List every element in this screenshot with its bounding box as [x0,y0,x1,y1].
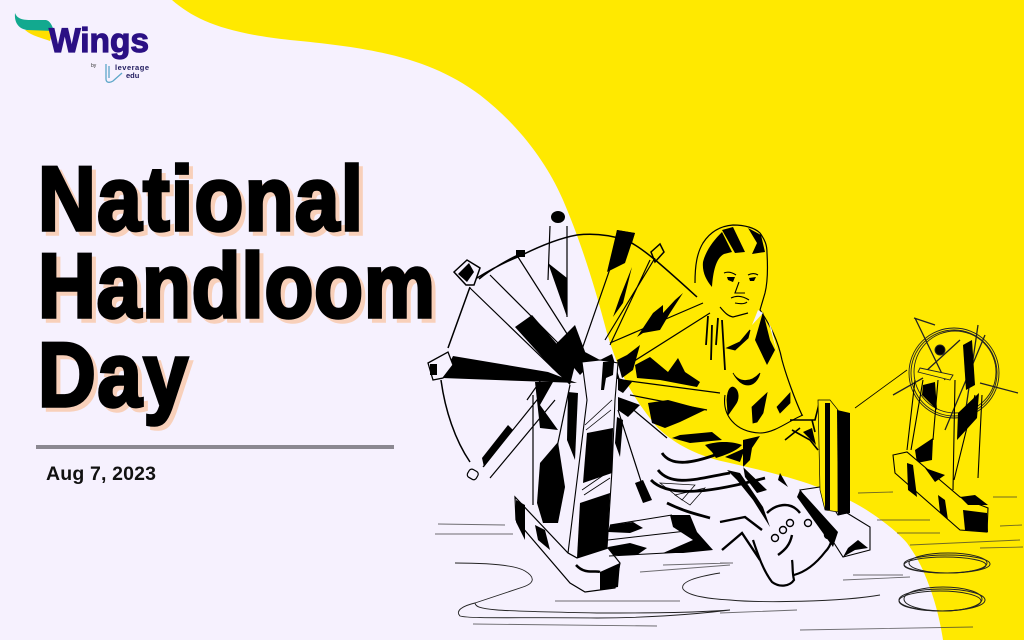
icon: teal wing [15,13,54,31]
icon: yellow wing [25,30,53,41]
water swirl [455,563,880,618]
yarn thread [855,370,907,408]
wheel spoke black panels [442,230,705,523]
logo by text: by [91,63,97,69]
small charkha frame [907,380,982,490]
title text [38,148,435,426]
title [38,148,439,430]
title text: Day [38,324,188,426]
scarf folds [727,330,750,350]
bare feet [753,505,832,586]
headscarf outline [695,225,802,415]
logo wordmark: Wings [49,22,149,60]
hair black shape [703,232,732,287]
logo leverage text: leverage [115,63,149,72]
main wheel base [515,497,620,592]
small charkha base [893,452,988,532]
face features [727,277,756,282]
title shadow: Day [42,328,192,430]
small charkha wheel [893,318,1018,430]
main wheel post [568,360,618,558]
small post and base [797,400,870,557]
divider rule [36,445,394,449]
title shadow [42,152,439,430]
skirt folds [651,453,765,518]
ground lines [435,492,1023,630]
logo leverage mark [106,64,122,82]
woman [651,225,820,560]
title text: Handloom [38,235,435,337]
wheel spoke outlines [470,226,720,505]
logo edu text: edu [126,71,140,80]
hand [785,400,820,450]
wheel rim [441,234,697,462]
robe black folds [727,373,790,423]
wheel caps [428,211,664,481]
title text: National [38,148,363,250]
title shadow: Handloom [42,239,439,341]
title shadow: National [42,152,367,254]
logo: Wings by Leverage Edu [15,13,149,82]
charkha lower slats [608,515,713,556]
small charkha [893,318,1018,532]
date: Aug 7, 2023 [46,463,156,485]
yarn rings [899,553,990,611]
illustration: woman at spinning wheel [428,211,1023,630]
